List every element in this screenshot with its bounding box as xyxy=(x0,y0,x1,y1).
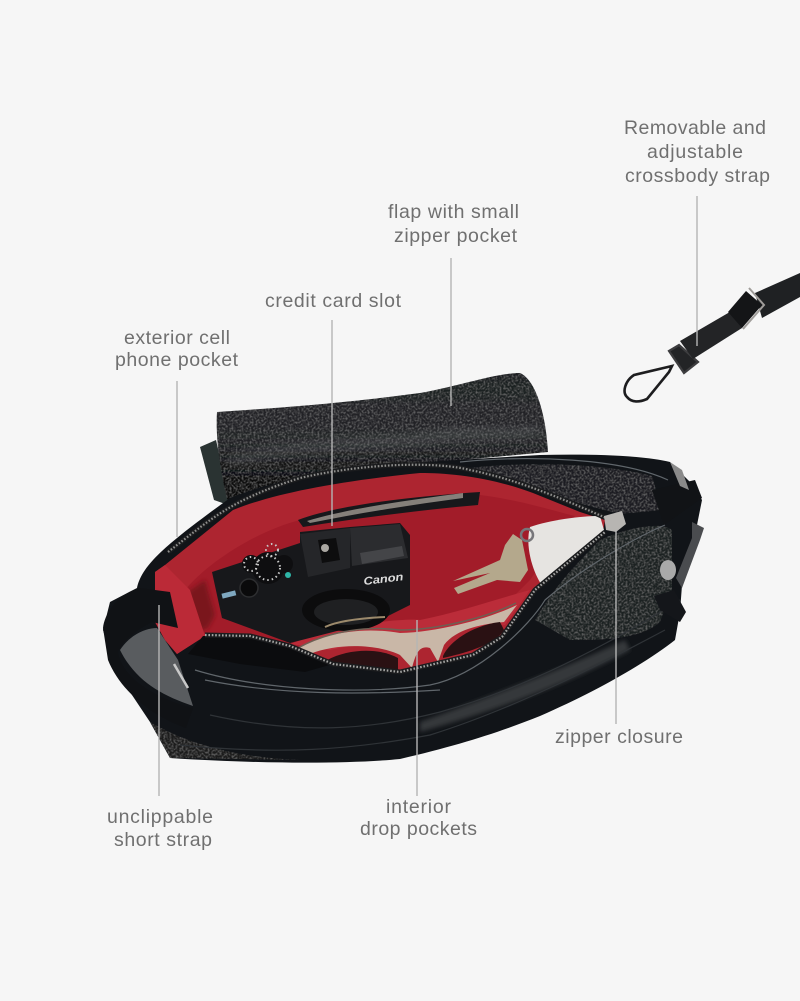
metal ring xyxy=(669,345,698,373)
camera brand: Canon xyxy=(363,571,404,588)
label: removable strap: crossbody strap xyxy=(625,165,770,187)
label: drop pockets: interior xyxy=(386,796,452,818)
label: short strap: short strap xyxy=(114,829,212,851)
label: flap pocket: flap with small xyxy=(388,201,519,223)
back panel of flap xyxy=(200,440,231,506)
right side hardware xyxy=(652,462,704,622)
label: flap pocket: zipper pocket xyxy=(394,225,518,247)
label: zipper closure: zipper closure xyxy=(555,726,683,748)
camera xyxy=(212,523,410,643)
white pouch xyxy=(528,516,604,584)
interior red lining xyxy=(155,473,605,672)
bag illustration xyxy=(103,373,704,763)
short strap xyxy=(103,588,193,728)
red drop pocket fold xyxy=(290,590,530,650)
leader lines xyxy=(159,196,697,796)
label: cell phone pocket: phone pocket xyxy=(115,349,239,371)
label: cell phone pocket: exterior cell xyxy=(124,327,230,349)
keys xyxy=(453,529,533,594)
clip hook xyxy=(625,366,672,401)
label: removable strap: adjustable xyxy=(647,141,743,163)
piping and stitching xyxy=(180,459,680,750)
zipper pull xyxy=(604,511,626,532)
label: drop pockets: drop pockets xyxy=(360,818,477,840)
zippers xyxy=(168,465,606,672)
bag body xyxy=(103,455,702,763)
front flap under zipper xyxy=(188,636,333,672)
label: removable strap: Removable and xyxy=(624,117,766,139)
label: short strap: unclippable xyxy=(107,806,213,828)
top right leather panel xyxy=(470,464,662,514)
strap right section xyxy=(755,273,800,318)
sunglasses xyxy=(296,603,517,670)
lower pebbled leather xyxy=(150,722,300,760)
label: credit card slot: credit card slot xyxy=(265,290,402,312)
credit card slot xyxy=(298,492,480,527)
crossbody strap accessory xyxy=(625,273,800,401)
buckle xyxy=(728,288,764,329)
front leather highlights xyxy=(420,640,630,732)
side leather panel xyxy=(535,526,672,640)
strap lower section xyxy=(680,309,742,359)
flap xyxy=(217,373,548,502)
